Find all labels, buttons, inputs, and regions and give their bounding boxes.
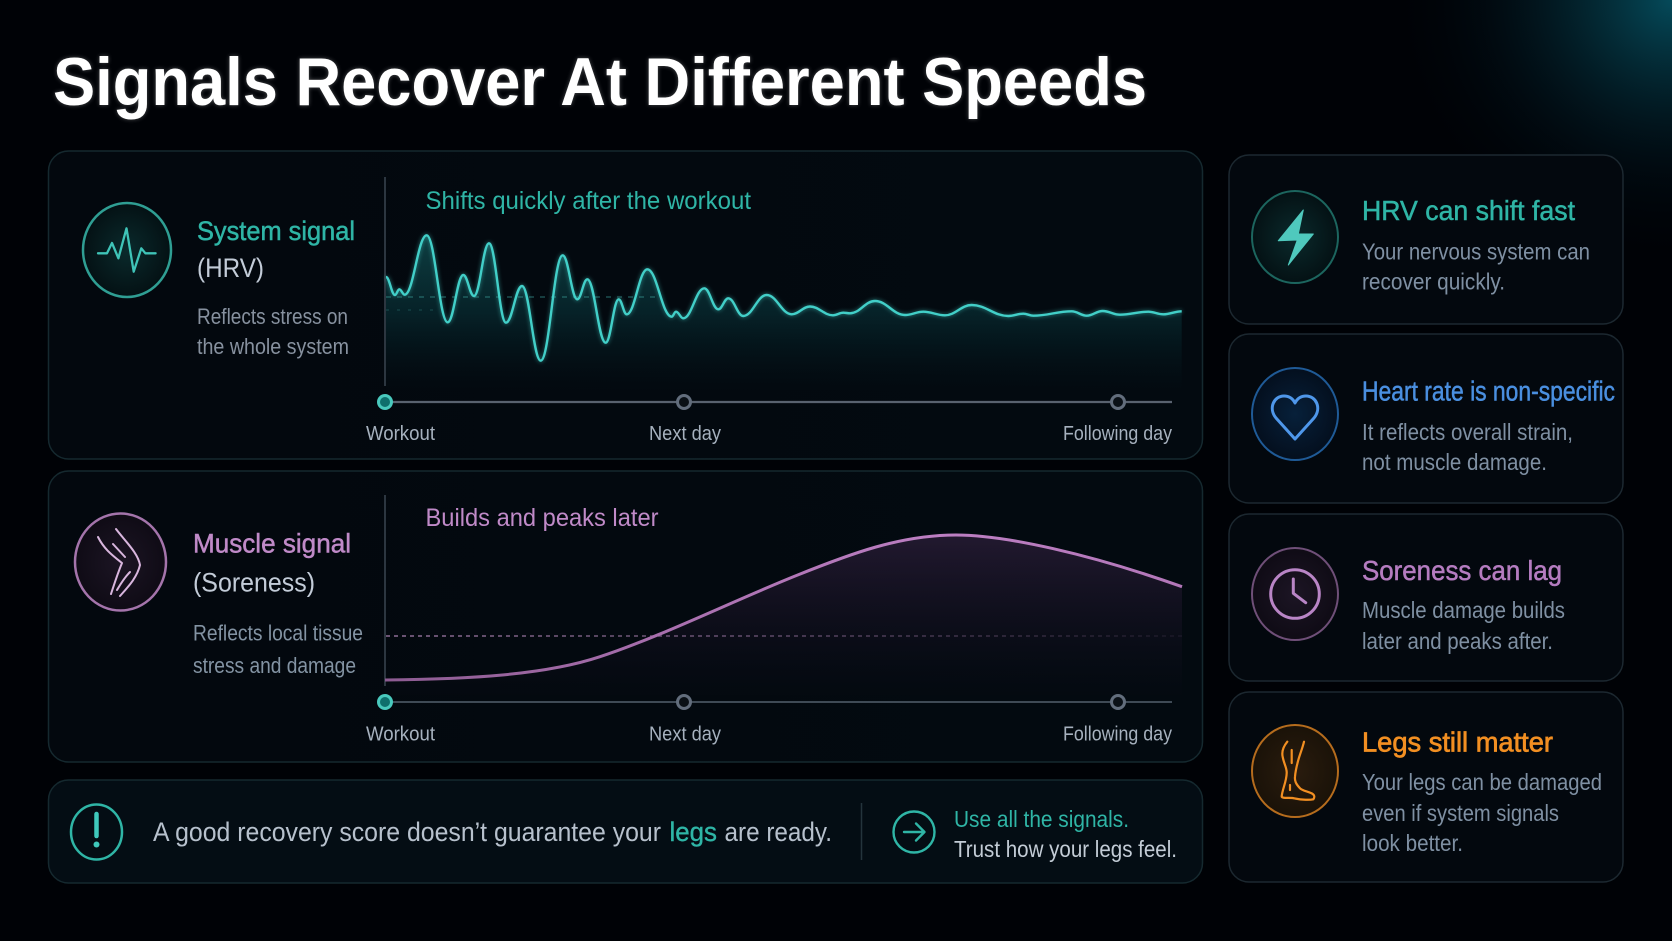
icon: pulse: [83, 203, 171, 297]
timeline: system signal: Workout: [366, 423, 435, 445]
icon: arrow: [894, 812, 934, 852]
card text: [1362, 419, 1573, 475]
heading: system signal: System signal: [197, 216, 355, 246]
text: system description: [197, 304, 349, 359]
timeline: muscle signal: Next day: [649, 724, 721, 746]
chart: HRV line: [386, 235, 1182, 390]
card text: even if system signals: [1362, 800, 1559, 826]
text: callout message: are ready.: [724, 817, 832, 847]
card text: recover quickly.: [1362, 268, 1505, 294]
chart caption: Builds and peaks later: [426, 504, 658, 532]
card text: Muscle damage builds: [1362, 597, 1565, 623]
card text: Your nervous system can: [1362, 238, 1590, 264]
card: soreness can lag: [1229, 514, 1623, 681]
text: muscle description: [193, 620, 363, 678]
title: Signals Recover At Different Speeds: [53, 44, 1147, 120]
timeline: muscle signal: Workout: [366, 724, 435, 746]
text: system description: Reflects stress on: [197, 304, 348, 329]
heading: muscle signal: Muscle signal: [193, 528, 351, 558]
card heading: Legs still matter: [1362, 726, 1553, 758]
timeline: system signal: Next day: [649, 423, 721, 445]
text: callout message: legs: [670, 817, 717, 847]
heading: HRV: (HRV): [197, 253, 264, 283]
chart caption: Shifts quickly after the workout: [426, 187, 751, 215]
timeline: system signal: Following day: [1063, 423, 1172, 445]
text: use all the signals: Use all the signals.: [954, 806, 1129, 832]
timeline: muscle signal: [366, 696, 1172, 746]
icon: clock: [1252, 548, 1338, 640]
card: heart rate is non-specific: [1229, 334, 1623, 503]
card text: look better.: [1362, 830, 1463, 856]
panel: muscle signal (soreness): [48, 471, 1202, 762]
card text: [1362, 597, 1565, 654]
card: HRV can shift fast: [1229, 155, 1623, 324]
card text: Your legs can be damaged: [1362, 769, 1602, 795]
callout: recovery warning: [48, 780, 1202, 883]
text: system description: the whole system: [197, 334, 349, 359]
heading: soreness: (Soreness): [193, 568, 315, 598]
text: muscle description: Reflects local tissue: [193, 620, 363, 646]
card text: not muscle damage.: [1362, 449, 1547, 475]
icon: muscle: [75, 514, 166, 610]
text: use all the signals: Trust how your legs feel.: [954, 836, 1177, 862]
card text: [1362, 238, 1590, 294]
timeline: system signal: [366, 396, 1172, 445]
card text: It reflects overall strain,: [1362, 419, 1573, 445]
timeline: muscle signal: Following day: [1063, 724, 1172, 746]
icon: leg: [1252, 725, 1338, 817]
chart: soreness curve: [385, 535, 1182, 695]
card text: [1362, 769, 1602, 856]
card heading: Heart rate is non-specific: [1362, 376, 1615, 406]
card: legs still matter: [1229, 692, 1623, 882]
panel: system signal (HRV): [48, 151, 1202, 459]
text: callout message: A good recovery score doesn’t guarantee your: [153, 817, 661, 847]
card heading: Soreness can lag: [1362, 555, 1562, 586]
text: use all the signals: [954, 806, 1177, 862]
card heading: HRV can shift fast: [1362, 195, 1575, 226]
text: muscle description: stress and damage: [193, 653, 356, 678]
icon: heart: [1252, 368, 1338, 460]
card text: later and peaks after.: [1362, 628, 1553, 654]
icon: lightning bolt: [1252, 191, 1338, 283]
icon: exclamation: [71, 804, 122, 860]
